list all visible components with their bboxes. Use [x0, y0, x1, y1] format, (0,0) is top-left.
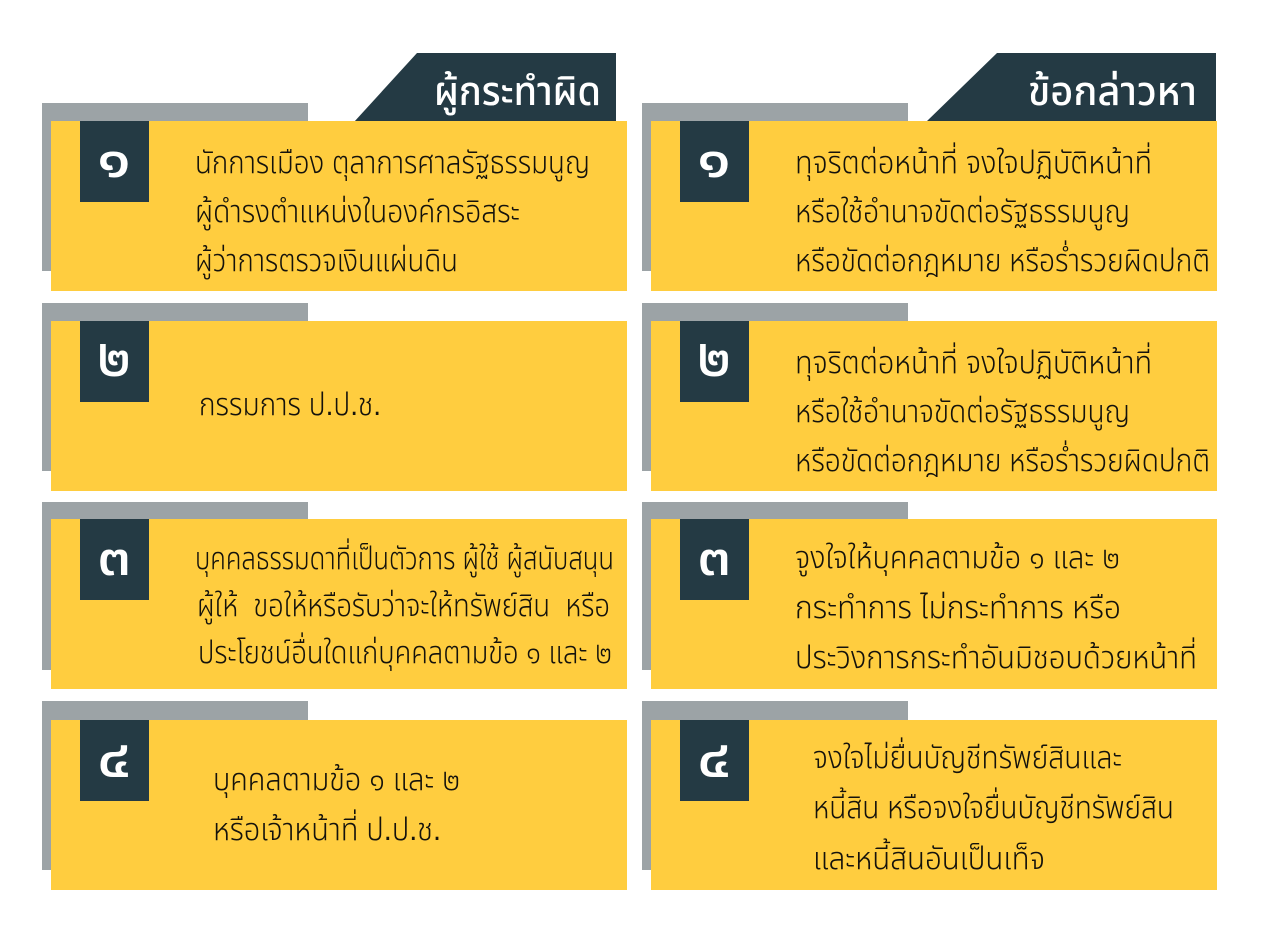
panel: offender 4: ๔ [97, 729, 131, 789]
panel: offender 4: บุคคลตามข้อ ๑ และ ๒ [213, 762, 460, 798]
panel: charge 1: หรือใช้อำนาจขัดต่อรัฐธรรมนูญ [795, 194, 1130, 231]
panel: offender 1: ผู้ดำรงตำแหน่งในองค์กรอิสระ [195, 194, 520, 231]
panel: offender 2: กรรมการ ป.ป.ช. [199, 387, 381, 422]
panel: charge 4: และหนี้สินอันเป็นเท็จ [813, 838, 1045, 876]
panel: offender 1: ๑ [97, 129, 131, 189]
panel: charge 3: กระทำการ ไม่กระทำการ หรือ [795, 590, 1121, 625]
panel: offender 3 [42, 502, 627, 689]
panel: charge 1: ๑ [697, 129, 731, 189]
panel: charge 3: จูงใจให้บุคคลตามข้อ ๑ และ ๒ [795, 540, 1120, 577]
panel: charge 2: หรือใช้อำนาจขัดต่อรัฐธรรมนูญ [795, 394, 1130, 431]
panel: charge 1 [642, 103, 1217, 291]
panel: charge 1: ทุจริตต่อหน้าที่ จงใจปฏิบัติหน้าที่ [795, 142, 1152, 181]
panel: offender 1: ผู้ว่าการตรวจเงินแผ่นดิน [195, 243, 458, 280]
column: charges [642, 53, 1217, 890]
panel: charge 2: หรือขัดต่อกฎหมาย หรือร่ำรวยผิดปกติ [795, 440, 1210, 478]
panel: charge 1: หรือขัดต่อกฎหมาย หรือร่ำรวยผิดปกติ [795, 240, 1210, 278]
header: offenders: ผู้กระทำผิด [434, 70, 601, 115]
panel: charge 4 [642, 701, 1217, 890]
panel: charge 3 [642, 502, 1217, 689]
column: offenders [42, 53, 627, 890]
panel: charge 3: ๓ [697, 527, 731, 587]
panel: charge 2: ทุจริตต่อหน้าที่ จงใจปฏิบัติหน้าที่ [795, 342, 1152, 381]
panel: charge 3: ประวิงการกระทำอันมิชอบด้วยหน้าที่ [795, 637, 1197, 675]
panel: offender 1: นักการเมือง ตุลาการศาลรัฐธรรมนูญ [195, 145, 590, 182]
header: charges [926, 53, 1216, 122]
panel: offender 2 [42, 303, 627, 491]
panel: charge 2 [642, 303, 1217, 491]
panel: offender 4: หรือเจ้าหน้าที่ ป.ป.ช. [213, 809, 441, 847]
panel: offender 3: ๓ [97, 527, 131, 587]
panel: charge 4: จงใจไม่ยื่นบัญชีทรัพย์สินและ [813, 737, 1122, 775]
header: offenders [354, 53, 616, 122]
panel: offender 3: บุคคลธรรมดาที่เป็นตัวการ ผู้ใช้ ผู้สนับสนุน [195, 538, 614, 578]
panel: charge 4: หนี้สิน หรือจงใจยื่นบัญชีทรัพย์สิน [813, 787, 1174, 825]
panel: offender 1 [42, 103, 627, 291]
panel: offender 2: ๒ [97, 328, 131, 388]
panel: offender 3: ประโยชน์อื่นใดแก่บุคคลตามข้อ ๑ และ ๒ [198, 632, 612, 671]
panel: offender 4 [42, 701, 627, 890]
header: charges: ข้อกล่าวหา [1028, 70, 1197, 114]
panel: offender 3: ผู้ให้ ขอให้หรือรับว่าจะให้ทรัพย์สิน หรือ [197, 588, 610, 625]
panel: charge 4: ๔ [697, 729, 731, 789]
panel: charge 2: ๒ [697, 328, 731, 388]
